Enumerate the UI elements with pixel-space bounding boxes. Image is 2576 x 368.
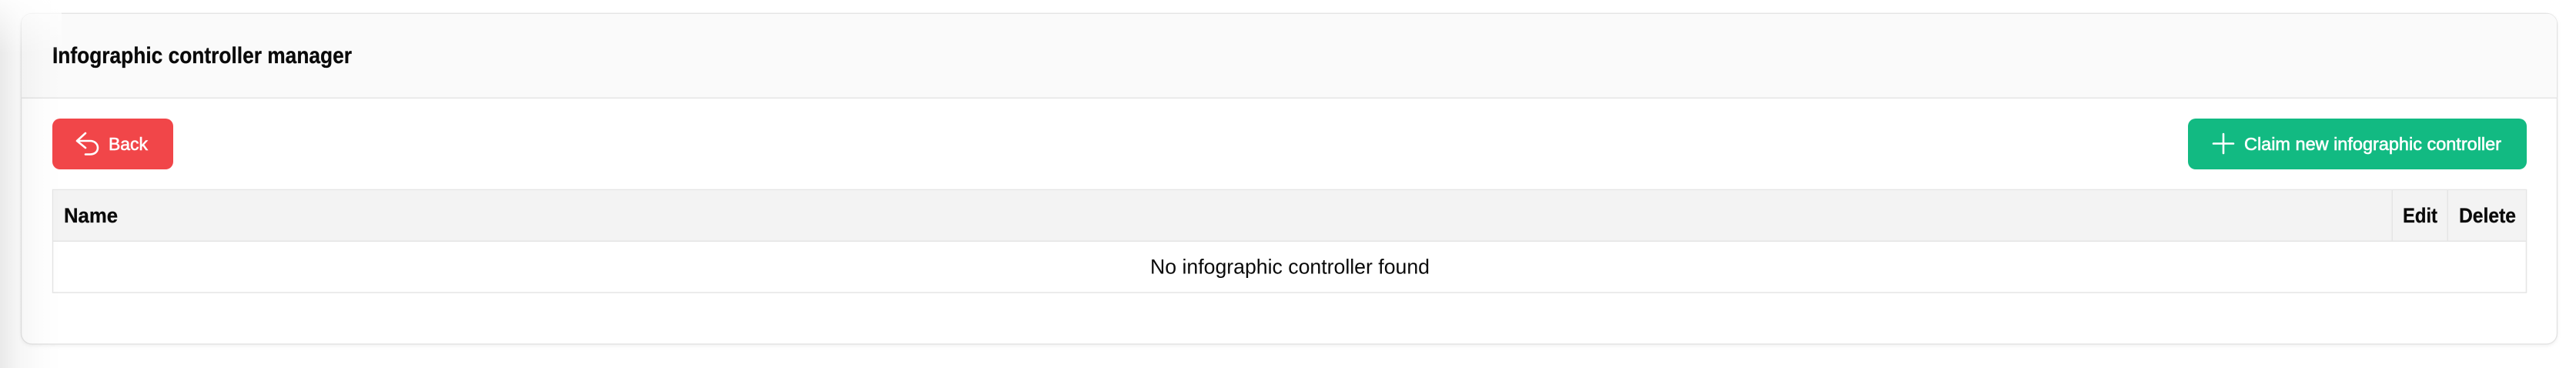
column header: edit: Edit <box>2403 204 2437 227</box>
empty table message: No infographic controller found <box>1150 256 1430 279</box>
panel: card header <box>22 14 2557 99</box>
button: back <box>52 119 173 169</box>
button label: back: Back <box>109 134 148 154</box>
icon: back arrow <box>77 133 98 154</box>
column header: delete: Delete <box>2459 204 2516 227</box>
heading: Infographic controller manager <box>52 43 352 69</box>
button label: claim: Claim new infographic controller <box>2244 134 2501 154</box>
table header row <box>53 190 2526 242</box>
table: infographic controllers <box>52 189 2527 293</box>
column header: name: Name <box>64 204 118 227</box>
button: claim new infographic controller <box>2188 119 2527 169</box>
icon: plus <box>2213 134 2233 153</box>
